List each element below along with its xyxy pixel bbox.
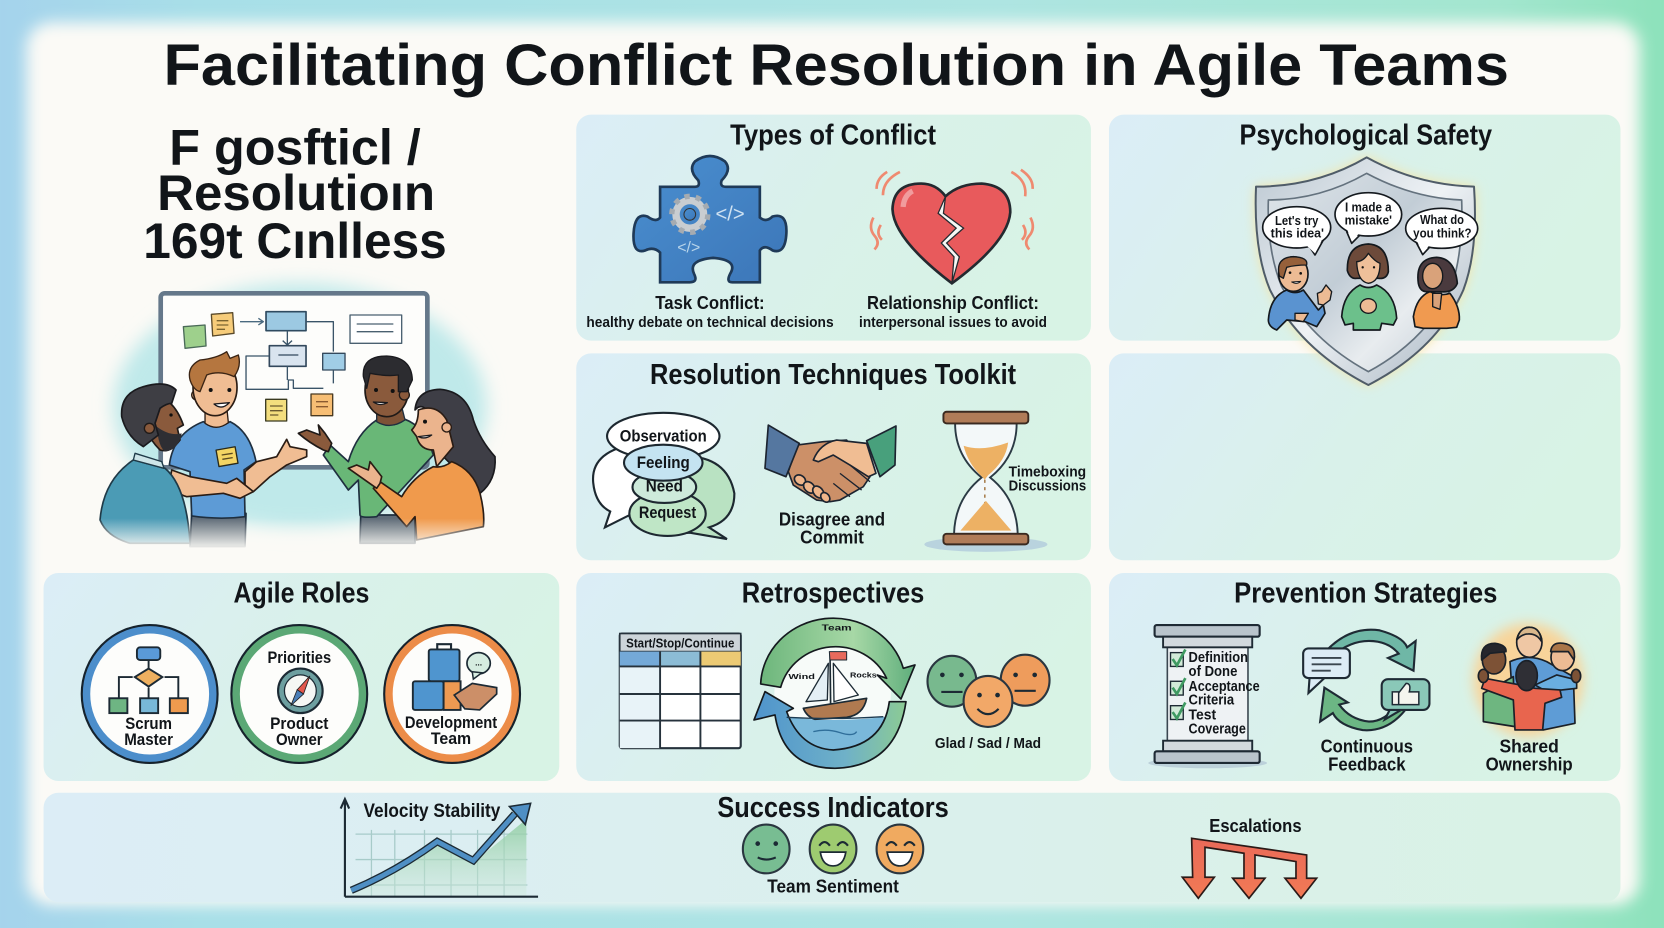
icon: retrospective cycle with boat: Rocks [850, 670, 877, 679]
speech bubble: lets try: Let's try [1275, 214, 1318, 228]
icon: retrospective cycle with boat: Team [822, 624, 852, 633]
icon: puzzle piece: </> [677, 240, 700, 257]
left subtitle heading: F ɡosfticl / [169, 119, 421, 175]
person: bearded man [100, 384, 190, 543]
label: task conflict [586, 293, 834, 331]
panel: types of conflict [576, 115, 1091, 341]
table: start stop continue: Start/Stop/Continue [626, 635, 734, 650]
icon: puzzle piece [633, 156, 786, 282]
chart: velocity stability [341, 799, 538, 897]
label: continuous feedback: Feedback [1328, 754, 1406, 774]
left subtitle heading: 169t Cınlless [143, 213, 447, 269]
role: product owner: Product [270, 715, 329, 733]
table: start stop continue [620, 634, 741, 748]
label: disagree and commit: Commit [800, 527, 864, 547]
person: green [1342, 244, 1397, 330]
icon: shield with people [1256, 157, 1478, 385]
label: timeboxing: Discussions [1009, 478, 1086, 494]
icon: retrospective cycle with boat: Wind [788, 672, 815, 681]
left subtitle heading: Resolutioın [157, 165, 435, 221]
role: scrum master: Scrum [125, 715, 172, 733]
panel: psychological safety: Psychological Safety [1239, 119, 1492, 151]
left subtitle heading [143, 119, 447, 269]
label: relationship conflict: interpersonal issues to avoid [859, 315, 1047, 331]
role: scrum master: Master [124, 731, 174, 749]
icon: NVC speech bubbles: Observation [620, 427, 707, 445]
panel: agile roles [44, 573, 559, 781]
panel: retrospectives [576, 573, 1091, 781]
panel: prevention strategies [1109, 573, 1620, 781]
panel: resolution techniques toolkit [576, 353, 1091, 560]
role: development team: Team [431, 730, 471, 748]
icon: checklist pillar: Test [1189, 707, 1216, 723]
speech bubble: mistake: I made a [1345, 201, 1393, 215]
icon: shared ownership huddle [1473, 623, 1583, 737]
icon: escalation arrows [1182, 838, 1317, 898]
label: shared ownership: Ownership [1486, 754, 1573, 774]
icon: checklist pillar: of Done [1189, 664, 1237, 680]
icon: checklist pillar: Acceptance [1189, 679, 1260, 695]
speech bubble: mistake [1335, 193, 1402, 243]
label: timeboxing [1009, 464, 1086, 494]
icon: sentiment faces [743, 825, 923, 873]
chart: velocity stability: Velocity Stability [363, 801, 501, 822]
label: task conflict: Task Conflict: [655, 293, 765, 313]
icon: checklist pillar: Criteria [1189, 693, 1235, 709]
speech bubble: what do you think: you think? [1413, 226, 1472, 240]
label: escalations: Escalations [1209, 816, 1302, 836]
label: continuous feedback [1321, 736, 1413, 774]
icon: NVC speech bubbles: Request [639, 504, 697, 522]
icon: NVC speech bubbles: Feeling [637, 454, 690, 472]
person: green shirt [298, 356, 433, 543]
label: team sentiment: Team Sentiment [767, 876, 899, 896]
person: blue [1268, 257, 1332, 330]
icon: hourglass [924, 412, 1047, 552]
icon: mood faces [928, 655, 1050, 727]
illustration: team at whiteboard [93, 283, 503, 550]
label: continuous feedback: Continuous [1321, 736, 1413, 756]
person: blue shirt [169, 352, 307, 547]
role: product owner: Priorities [267, 649, 331, 667]
role: product owner: Owner [276, 731, 323, 749]
label: shared ownership: Shared [1499, 736, 1559, 756]
panel: empty teal [1109, 353, 1620, 560]
speech bubble: mistake: mistake' [1345, 214, 1392, 228]
label: disagree and commit [779, 509, 885, 547]
person: orange [1413, 257, 1459, 328]
panel: agile roles: Agile Roles [233, 578, 369, 610]
icon: NVC speech bubbles: Need [646, 477, 683, 495]
role: development team: ... [475, 657, 482, 667]
title: Facilitating Conflict Resolution in Agile Teams [163, 33, 1509, 98]
role: development team [384, 625, 520, 763]
icon: broken heart [871, 170, 1033, 283]
icon: puzzle piece: </> [716, 204, 745, 226]
whiteboard [161, 293, 427, 467]
panel: types of conflict: Types of Conflict [730, 119, 936, 151]
panel: prevention strategies: Prevention Strategies [1234, 578, 1497, 610]
label: relationship conflict: Relationship Conflict: [867, 293, 1039, 313]
label: relationship conflict [859, 293, 1047, 331]
icon: checklist pillar: Coverage [1189, 721, 1246, 737]
role: scrum master [82, 625, 218, 763]
icon: handshake [765, 425, 896, 504]
panel: resolution techniques toolkit: Resolution Techniques Toolkit [650, 359, 1017, 391]
icon: continuous feedback cycle [1303, 630, 1429, 730]
panel: success indicators [44, 792, 1620, 902]
label: shared ownership [1486, 736, 1573, 774]
icon: checklist pillar: Definition [1189, 650, 1248, 666]
label: disagree and commit: Disagree and [779, 509, 885, 529]
role: product owner [231, 625, 367, 763]
speech bubble: what do you think [1406, 208, 1478, 255]
panel: psychological safety [1109, 115, 1620, 385]
panel: success indicators: Success Indicators [717, 792, 949, 824]
role: development team: Development [405, 714, 498, 732]
person: orange sweater [348, 389, 495, 540]
icon: NVC speech bubbles [593, 413, 734, 539]
icon: checklist pillar [1148, 625, 1267, 768]
speech bubble: lets try: this idea' [1271, 227, 1324, 241]
label: timeboxing: Timeboxing [1009, 464, 1086, 480]
panel: retrospectives: Retrospectives [742, 578, 924, 610]
speech bubble: what do you think: What do [1420, 213, 1464, 227]
speech bubble: lets try [1263, 207, 1331, 255]
label: task conflict: healthy debate on technical decisions [586, 315, 834, 331]
icon: retrospective cycle with boat [754, 618, 915, 768]
label: glad sad mad: Glad / Sad / Mad [935, 736, 1041, 752]
